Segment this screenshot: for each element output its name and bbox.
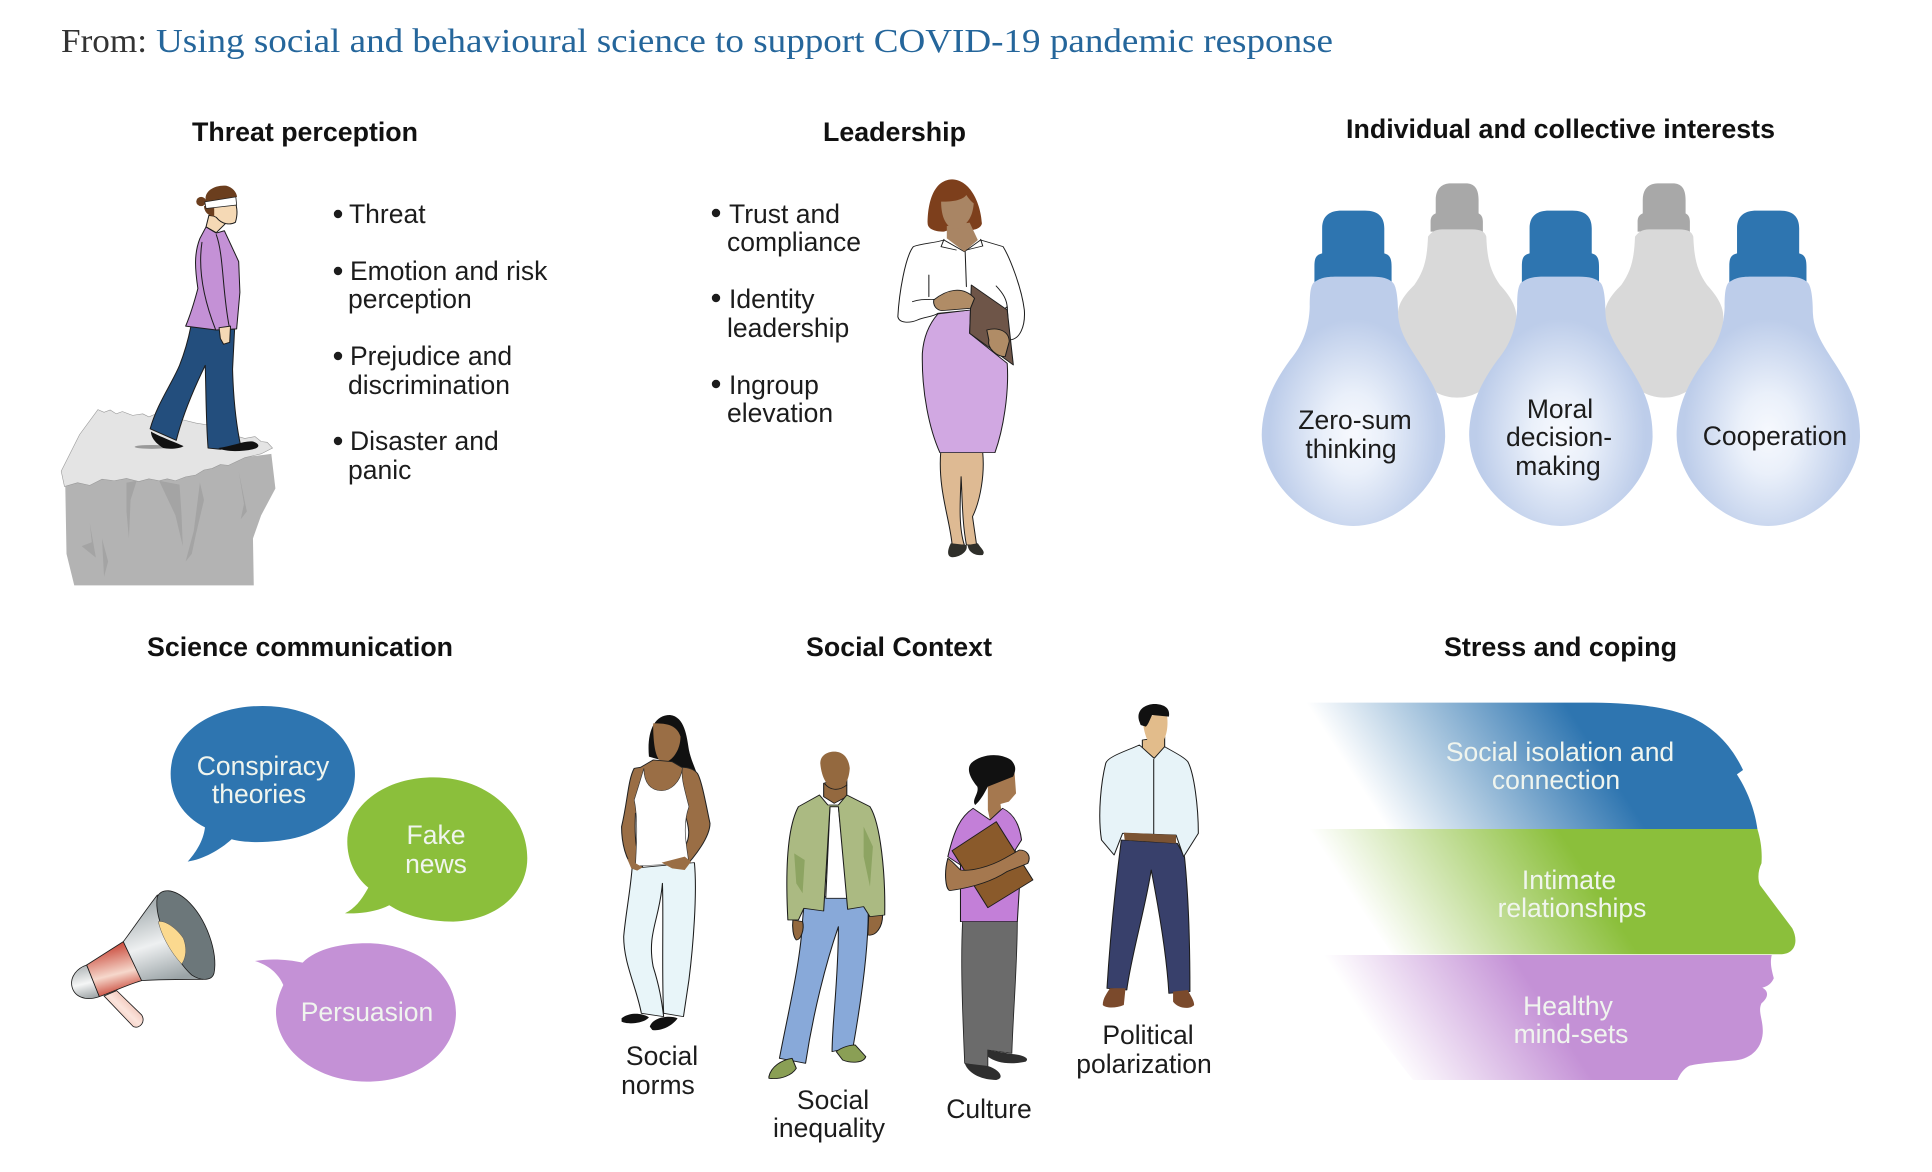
illustration: blindfolded woman on cliff edge [61,186,275,585]
bullet list: leadership topics [712,199,861,428]
person labels: polarization [1076,1049,1212,1079]
person: culture [946,755,1033,1080]
bullet list: threat perception topics: panic [348,455,411,485]
illustration: head silhouette bands [1306,703,1795,1080]
bullet list: leadership topics: Ingroup [729,370,819,400]
illustration: woman with folder [898,179,1024,557]
speech bubble: blue [171,706,355,862]
person: social norms [622,715,710,1030]
bulb labels: decision- [1506,422,1612,452]
person: social inequality [769,752,885,1079]
bullet list: threat perception topics: Threat [349,199,426,229]
person: political polarization [1100,704,1198,1008]
person labels: Social [626,1041,698,1071]
icon: grey bulbs [1398,183,1723,398]
bubble labels: Persuasion [301,997,433,1027]
heading: stress and coping: Stress and coping [1444,632,1677,662]
heading: science communication: Science communication [147,632,453,662]
bullet list: threat perception topics: discrimination [348,370,510,400]
bullet list: leadership topics: Trust and [729,199,840,229]
bullet list: threat perception topics: Emotion and risk [350,256,548,286]
bullet list: threat perception topics: Prejudice and [350,341,512,371]
illustration: four people [622,704,1198,1080]
icon: megaphone [72,891,215,1027]
bubble labels: theories [212,779,306,809]
bullet list: leadership topics: Identity [729,284,815,314]
panel: threat perception [61,117,548,585]
bulb labels: Zero-sum [1298,405,1412,435]
heading: leadership: Leadership [823,117,966,147]
band labels: Intimate [1522,865,1616,895]
person labels [621,1020,1212,1143]
illustration: light bulbs [1262,183,1860,526]
bullet list: leadership topics: elevation [727,398,833,428]
person labels: Political [1102,1020,1194,1050]
speech bubble: purple [255,943,456,1082]
bubble labels: Conspiracy [197,751,330,781]
person labels: norms [621,1070,695,1100]
bulb labels: Moral [1527,394,1593,424]
bulb labels: thinking [1305,434,1397,464]
speech bubble: green [345,777,527,922]
person labels: Social [797,1085,869,1115]
bubble labels [197,751,467,1027]
bulb labels [1298,394,1847,481]
bulb labels: making [1515,451,1601,481]
panel: leadership [712,117,1024,557]
panel: science communication [72,632,527,1082]
title: source line: Using social and behavioural science to support COVID-19 pandemic response [156,23,1333,60]
bullet list: leadership topics: leadership [727,313,849,343]
title: source line: From: [61,23,147,60]
panel: individual and collective interests [1262,114,1860,526]
bullet list: threat perception topics: perception [348,284,472,314]
illustration: speech bubbles and megaphone [72,706,527,1082]
heading: individual and collective interests: Individual and collective interests [1346,114,1775,144]
person labels: inequality [773,1113,886,1143]
bubble labels: news [405,849,467,879]
band labels: Healthy [1523,991,1614,1021]
bullet list: leadership topics: compliance [727,227,861,257]
band labels [1446,737,1674,1049]
band labels: Social isolation and [1446,737,1674,767]
icon: blue bulbs [1262,211,1860,526]
panel: stress and coping [1306,632,1795,1080]
bullet list: threat perception topics: Disaster and [350,426,499,456]
bubble labels: Fake [407,820,465,850]
band labels: relationships [1498,893,1646,923]
panel: social context [621,632,1212,1143]
bulb labels: Cooperation [1703,421,1847,451]
heading: social context: Social Context [806,632,992,662]
heading: threat perception: Threat perception [192,117,418,147]
person labels: Culture [946,1094,1032,1124]
bullet list: threat perception topics [334,199,548,485]
band labels: connection [1492,765,1620,795]
band labels: mind-sets [1514,1019,1628,1049]
